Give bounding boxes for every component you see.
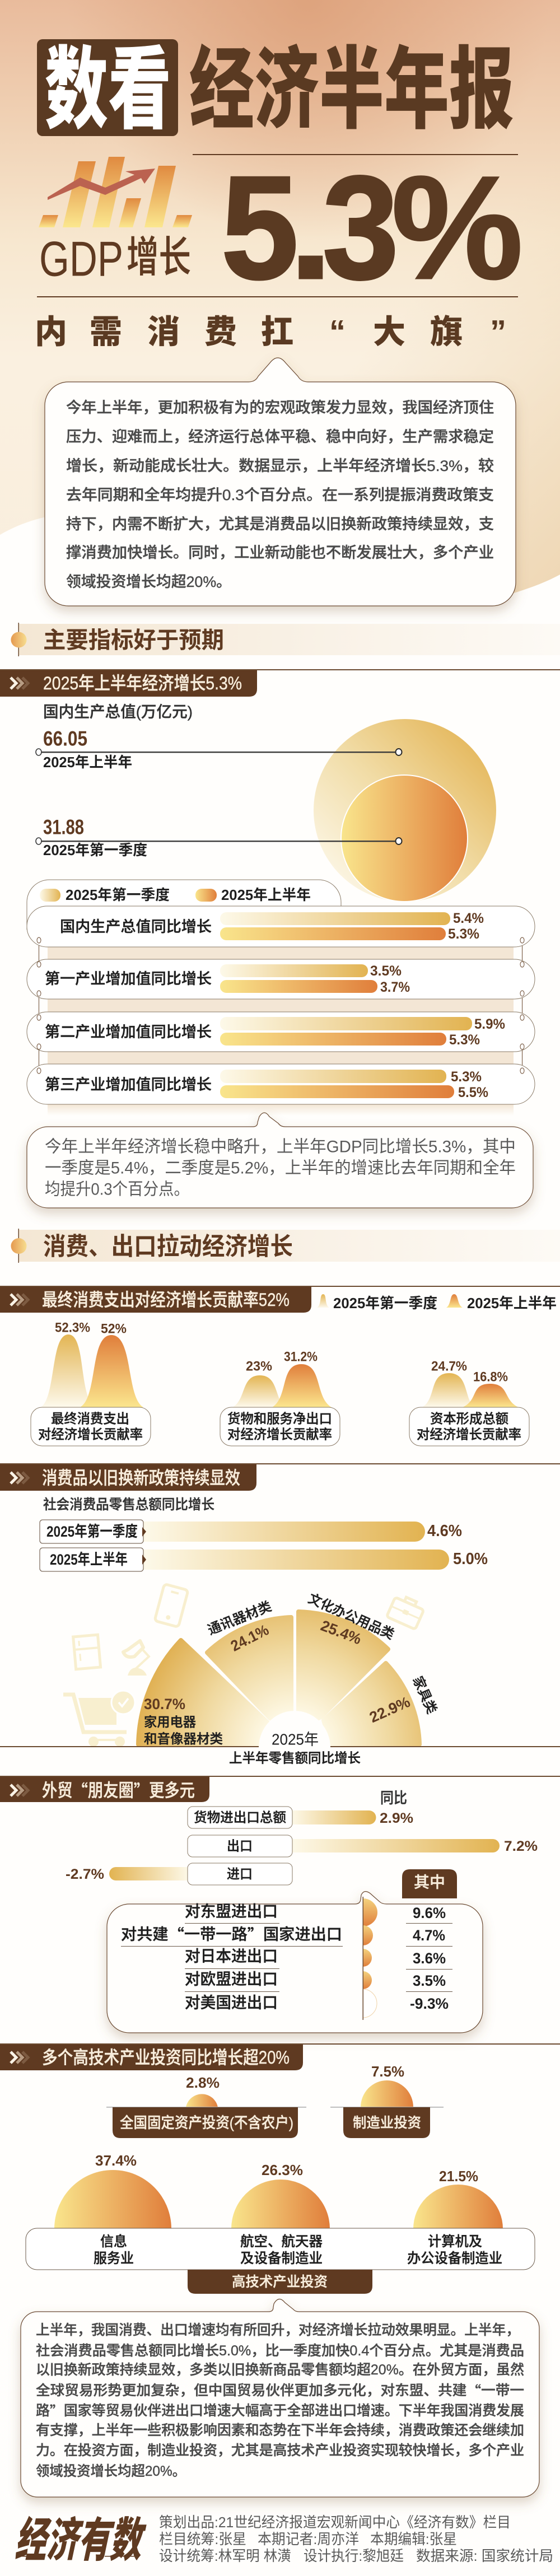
chart: manufacturing investment [330,2063,444,2138]
chart: capital formation contribution: 资本形成总额 [430,1411,508,1427]
chart: GDP nested circles: 国内生产总值(万亿元) [43,703,193,720]
icon: GDP bar chart with rising arrow [39,157,192,227]
row: primary industry: 第一产业增加值同比增长 [45,970,212,987]
panel: trade partners [107,1892,483,2033]
bar: retail H1: 2025年上半年 [50,1551,128,1568]
segment: cultural and office supplies: 文化办公用品类 [306,1591,396,1642]
row: ASEAN: 对东盟进出口 [185,1903,278,1920]
row: tertiary industry: 第三产业增加值同比增长 [45,1076,212,1093]
row: GDP growth: 国内生产总值同比增长 [60,918,212,935]
credits: 设计执行:黎旭廷 [304,2547,404,2564]
row: USA: 对美国进出口 [185,1994,278,2012]
bar: retail Q1: 2025年第一季度 [46,1523,138,1540]
panel: closing commentary: 领域投资增长均超20%。 [36,2463,186,2479]
credits [159,2514,553,2564]
row: Japan: 3.6% [413,1950,446,1967]
legend: bells: 2025年上半年 [467,1295,557,1312]
circle: first half [314,719,496,902]
chart: net exports contribution: 货物和服务净出口 [227,1411,332,1427]
row: primary industry [27,959,535,999]
panel: intro text: 压力、迎难而上，经济运行总体平稳、稳中向好，生产需求稳定 [66,428,494,445]
chart: capital formation contribution: 对经济增长贡献率 [417,1427,521,1443]
bar: exports: 7.2% [504,1838,538,1854]
headline number 5.3%: % [391,146,523,310]
legend panel: 2025年第一季度 [66,886,170,903]
half circles [363,1897,377,2020]
bar: imports: 进口 [227,1867,253,1882]
icon: briefcase [386,1593,426,1630]
background band behind rows [39,940,522,1116]
row: tertiary industry [27,1064,535,1104]
chart: retail fan chart: 2025年 [272,1730,319,1748]
bar: imports [66,1863,292,1885]
icon: shopping cart [63,1691,135,1747]
segment: home appliances: 家用电器 [144,1715,196,1729]
chart: GDP nested circles [36,703,496,902]
divider top [193,154,518,155]
value: 31.88: 31.88 [43,815,84,839]
row: GDP growth [27,906,535,947]
headline number 5.3%: . [289,146,333,310]
value: 66.05: 66.05 [43,727,87,750]
chart: net exports contribution: 对经济增长贡献率 [227,1427,332,1443]
chart: capital formation contribution [409,1359,529,1446]
row: EU: 3.5% [413,1972,446,1989]
panel: intro text: 去年同期和全年均提升0.3个百分点。在一系列提振消费政策支 [66,487,494,503]
panel: closing commentary: 路”国家等贸易伙伴进出口增速大幅高于全部进出口增速。下半年我国消费发展 [36,2401,524,2421]
bar: total trade: 货物进出口总额 [194,1810,286,1826]
panel: GDP commentary: 今年上半年经济增长稳中略升，上半年GDP同比增长5.3%，其中 [45,1138,516,1156]
chart: fixed asset investment [106,2074,306,2138]
panel: intro text: 撑消费加快增长。同时，工业新动能也不断发展壮大，多个产业 [66,544,494,561]
sub heading: 2025年上半年经济增长5.3% [0,669,560,697]
panel: closing commentary: 有支撑，上半年一些积极影响因素和态势在下半年会持续，消费政策还会继续加 [36,2423,524,2438]
headline number 5.3% [221,146,523,310]
headline number 5.3%: 5 [221,146,298,310]
segment: cultural and office supplies [298,1591,396,1728]
caption: 同比: 同比 [380,1790,407,1807]
sub heading: 2025年上半年经济增长5.3%: 2025年上半年经济增长5.3% [43,673,242,693]
panel: GDP commentary [27,1113,533,1208]
section heading: 主要指标好于预期: 主要指标好于预期 [43,627,224,653]
row: primary industry: 3.5% [370,963,402,979]
segment: home appliances [138,1640,295,1746]
panel: closing commentary: 以旧换新政策持续显效，多类以旧换新商品零售额均超20%。在外贸方面，虽然 [36,2362,524,2378]
row: USA [185,1994,449,2012]
row: USA: -9.3% [410,1995,449,2012]
row: tertiary industry: 5.3% [451,1069,482,1085]
sub heading: 消费品以旧换新政策持续显效 [0,1463,560,1491]
icon: desk lamp [123,1641,149,1676]
bar: retail Q1 [40,1520,462,1543]
dome: computer and office equipment [413,2168,503,2229]
center hub [259,1711,330,1748]
segment: communication equipment: 24.1% [228,1621,272,1655]
tab: 其中: 其中 [414,1874,445,1891]
row: secondary industry: 5.3% [449,1032,480,1048]
bar: exports [188,1835,538,1857]
icon: fridge [73,1635,101,1669]
text: retail sales caption: 社会消费品零售总额同比增长 [43,1497,214,1513]
dome: computer and office equipment: 21.5% [439,2168,478,2185]
segment: furniture [324,1663,440,1744]
section heading: 消费、出口拉动经济增长 [11,1229,560,1263]
panel: intro text: 增长，新动能成长壮大。数据显示，上半年经济增长5.3%，较 [66,458,494,474]
panel: closing commentary: 社会消费品零售总额同比增长5.0%，比一季度加快0.4个百分点。尤其是消费品 [36,2343,524,2359]
chart: net exports contribution: 23% [246,1359,272,1374]
label: GDP增长: GDP [39,231,123,287]
sub heading: 多个高技术产业投资同比增长超20%: 多个高技术产业投资同比增长超20% [42,2047,290,2068]
dome: aerospace [231,2162,330,2229]
sub heading: 外贸“朋友圈”更多元: 外贸“朋友圈”更多元 [42,1777,195,1803]
chart: final consumption contribution [31,1320,151,1446]
value: 66.05: 2025年上半年 [43,754,132,771]
section heading: 主要指标好于预期 [11,623,560,656]
segment: cultural and office supplies: 25.4% [319,1617,363,1648]
title badge: 数看: 数看 [45,39,171,140]
section heading: 消费、出口拉动经济增长: 消费、出口拉动经济增长 [43,1233,293,1260]
legend panel: 2025年上半年 [221,886,311,903]
bar: retail Q1: 4.6% [427,1522,462,1540]
chart: net exports contribution: 31.2% [284,1350,318,1364]
bar: exports: 出口 [227,1839,253,1854]
chart: retail fan chart [0,1591,560,1766]
chart: net exports contribution [220,1350,340,1446]
bar: imports: -2.7% [66,1866,104,1882]
credits: 本期记者:周亦洋 [258,2531,359,2547]
row: EU [185,1970,446,1989]
circle: first quarter [341,775,468,902]
credits: 栏目统筹:张星 [159,2531,246,2547]
panel: GDP commentary: 一季度是5.4%，二季度是5.2%，上半年的增速比去年同期和全年 [45,1159,516,1177]
value: 66.05 [36,727,402,771]
row: Belt and Road: 对共建“一带一路”国家进出口 [121,1923,342,1945]
panel: closing commentary: 全球贸易形势更加复杂，但中国贸易伙伴更加多元化，对东盟、共建 “一带一 [36,2381,524,2401]
legend: bells [317,1294,557,1312]
panel: high-tech categories: 航空、航天器 [240,2234,323,2250]
row: ASEAN [185,1903,446,1921]
panel: high-tech categories [26,2228,535,2270]
row: Belt and Road: 4.7% [413,1927,445,1944]
logo: 经济有数: 经济有数 [12,2514,150,2566]
row: primary industry: 3.7% [380,979,410,995]
bar: total trade: 2.9% [380,1810,413,1826]
value: 31.88 [36,815,402,858]
tab: 高技术产业投资: 高技术产业投资 [232,2274,328,2290]
sub heading: 最终消费支出对经济增长贡献率52% [0,1286,560,1313]
value: 31.88: 2025年第一季度 [43,842,147,858]
bar: retail H1 [40,1548,488,1571]
label: GDP增长: 增长 [127,234,191,281]
chart: final consumption contribution: 对经济增长贡献率 [38,1427,143,1443]
credits: 本期编辑:张星 [370,2531,457,2547]
divider bottom [37,296,518,297]
segment: communication equipment: 通讯器材类 [206,1599,274,1638]
chart: final consumption contribution: 最终消费支出 [51,1411,129,1427]
panel: high-tech categories: 服务业 [94,2251,134,2266]
row: Belt and Road [121,1923,445,1945]
dome: info services: 37.4% [95,2152,137,2169]
panel: closing commentary: 上半年，我国消费、出口增速均有所回升，对经济增长拉动效果明显。上半年， [36,2322,520,2338]
chart: final consumption contribution: 52% [101,1322,127,1336]
segment: communication equipment [206,1599,291,1728]
chart: fixed asset investment: 全国固定资产投资(不含农户) [120,2115,293,2131]
row: secondary industry [27,1012,535,1052]
credits: 策划出品:21世纪经济报道宏观新闻中心《经济有数》栏目 [159,2514,511,2531]
legend panel [27,880,341,930]
subtitle: 内需消费扛“大旗” [35,314,506,351]
segment: furniture: 家具类 [409,1674,440,1716]
row: EU: 对欧盟进出口 [185,1970,278,1988]
dome: info services [54,2152,171,2229]
segment: home appliances: 和音像器材类 [144,1732,223,1746]
panel: GDP commentary: 均提升0.3个百分点。 [45,1180,189,1198]
icon: phone [155,1584,188,1627]
panel: closing commentary: 力。在投资方面，制造业投资，尤其是高技术产业投资实现较快增长，多个产业 [36,2443,524,2458]
chart: manufacturing investment: 7.5% [371,2063,404,2080]
dome: aerospace: 26.3% [262,2162,303,2178]
row: GDP growth: 5.4% [453,911,484,926]
panel: intro text: 今年上半年，更加积极有为的宏观政策发力显效，我国经济顶住 [66,399,494,416]
row: secondary industry: 5.9% [474,1016,505,1032]
row: tertiary industry: 5.5% [458,1085,488,1100]
credits: 设计统筹:林军明 林潢 [159,2547,291,2564]
sub heading: 多个高技术产业投资同比增长超20% [0,2043,560,2070]
chart: retail fan chart: 上半年零售额同比增长 [229,1751,361,1766]
credits: 数据来源: 国家统计局 [416,2547,553,2564]
bar: retail H1: 5.0% [453,1550,488,1568]
chart: final consumption contribution: 52.3% [55,1320,90,1335]
sub heading: 消费品以旧换新政策持续显效: 消费品以旧换新政策持续显效 [42,1468,240,1488]
row: Japan [185,1948,446,1967]
chart: fixed asset investment: 2.8% [186,2074,220,2091]
panel: intro text [45,358,516,606]
tab: 其中 [402,1869,457,1898]
tab: 高技术产业投资 [188,2270,372,2294]
row: ASEAN: 9.6% [413,1905,446,1921]
chart: capital formation contribution: 16.8% [473,1370,508,1384]
panel: high-tech categories: 计算机及 [428,2234,482,2250]
panel: closing commentary [21,2299,539,2497]
title block [37,39,514,140]
bar: total trade [188,1807,413,1828]
legend: bells: 2025年第一季度 [333,1295,437,1312]
segment: furniture: 22.9% [367,1693,413,1726]
panel: intro text: 持下，内需不断扩大，尤其是消费品以旧换新政策持续显效，支 [66,516,494,533]
row: Japan: 对日本进出口 [185,1948,278,1964]
panel: high-tech categories: 信息 [100,2234,127,2250]
segment: home appliances: 30.7% [144,1696,185,1712]
sub heading: 外贸“朋友圈”更多元 [0,1776,560,1803]
panel: intro text: 领域投资增长均超20%。 [66,573,231,590]
panel: high-tech categories: 办公设备制造业 [407,2251,502,2266]
chart: manufacturing investment: 制造业投资 [353,2115,421,2131]
panel: high-tech categories: 及设备制造业 [240,2251,323,2266]
sub heading: 最终消费支出对经济增长贡献率52%: 最终消费支出对经济增长贡献率52% [42,1290,290,1310]
headline number 5.3%: 3 [323,146,399,310]
chart: capital formation contribution: 24.7% [431,1359,467,1374]
row: secondary industry: 第二产业增加值同比增长 [45,1024,212,1040]
row: GDP growth: 5.3% [448,926,479,942]
